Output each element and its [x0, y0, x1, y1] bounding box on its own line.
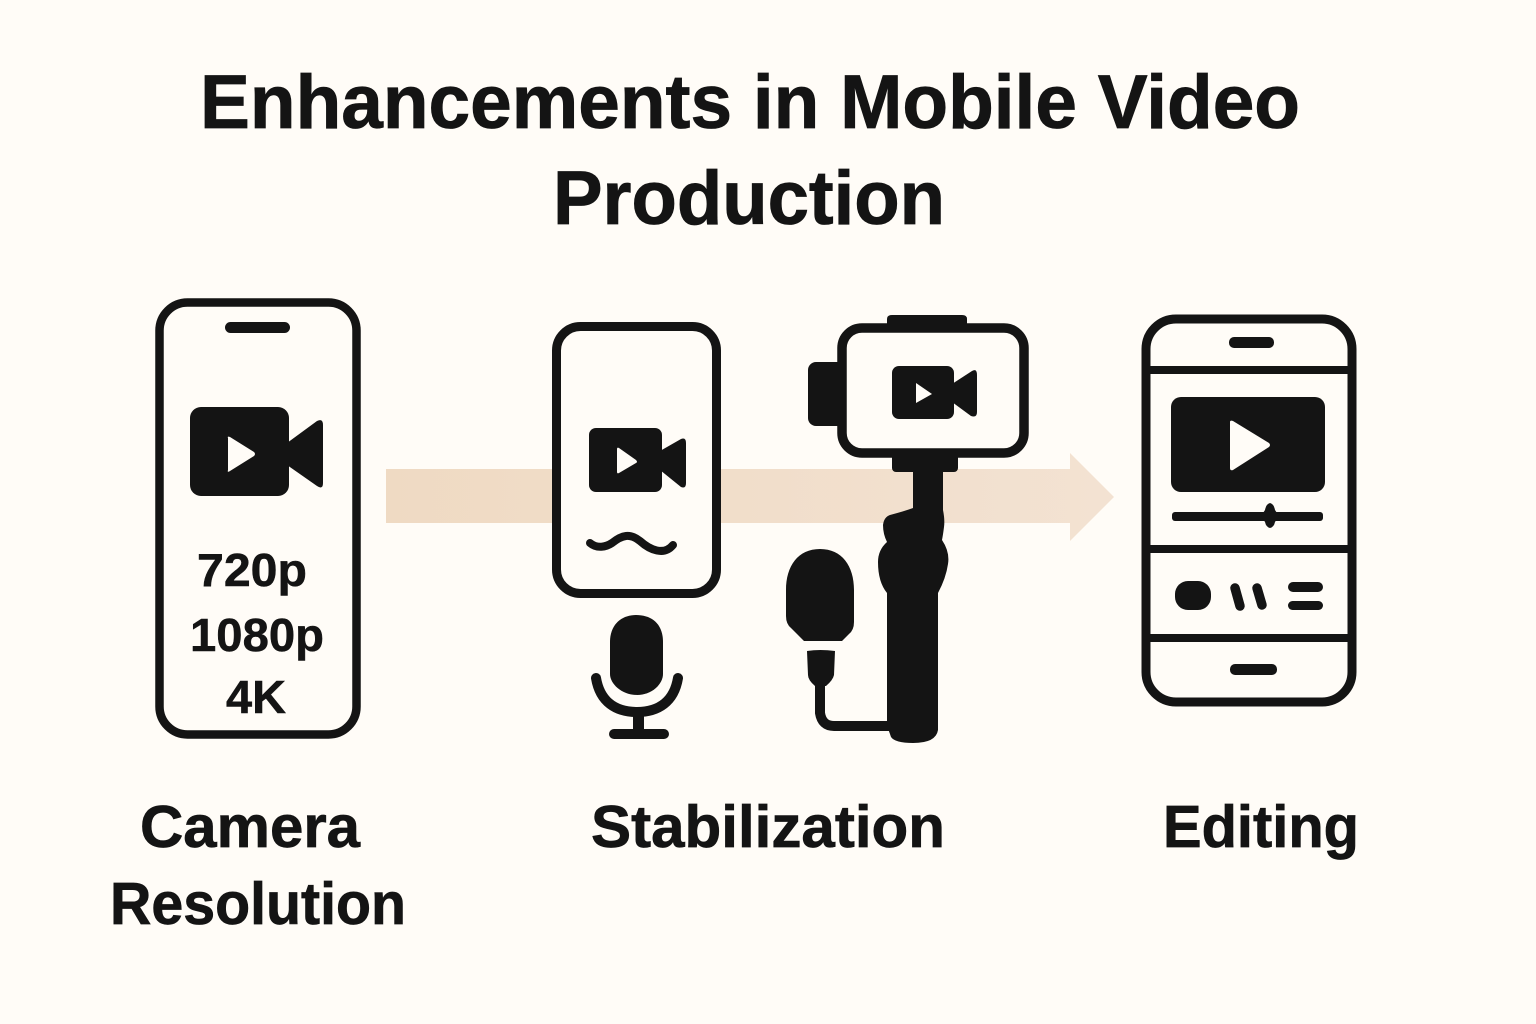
timeline slider: [1172, 503, 1323, 528]
icon: shake wave: [590, 536, 673, 551]
title: Enhancements in Mobile Video: [200, 60, 1300, 145]
label: editing: Editing: [1163, 794, 1359, 860]
icon: video player: [1171, 397, 1325, 492]
icon: microphone: [596, 615, 678, 739]
resolution labels: 1080p: [190, 609, 324, 661]
title: [200, 60, 1300, 241]
label: stabilization: Stabilization: [591, 794, 945, 860]
title: Production: [553, 156, 945, 241]
icon: handheld microphone: [786, 549, 854, 686]
icon: video camera small: [589, 428, 686, 492]
arrow: process flow: [386, 453, 1114, 541]
panel: stabilization phone: [556, 326, 716, 594]
panel: camera resolution phone: [160, 302, 356, 734]
label: camera resolution: Resolution: [110, 871, 406, 937]
label: camera resolution: Camera: [140, 794, 361, 860]
panel: editing phone: [1146, 319, 1352, 702]
icon: gimbal with camera: [786, 315, 1024, 743]
resolution labels: [190, 544, 324, 723]
editing controls: [1175, 581, 1323, 610]
resolution labels: 720p: [197, 544, 307, 596]
resolution labels: 4K: [226, 671, 286, 723]
label: camera resolution: [110, 794, 406, 937]
icon: video camera: [190, 407, 323, 496]
